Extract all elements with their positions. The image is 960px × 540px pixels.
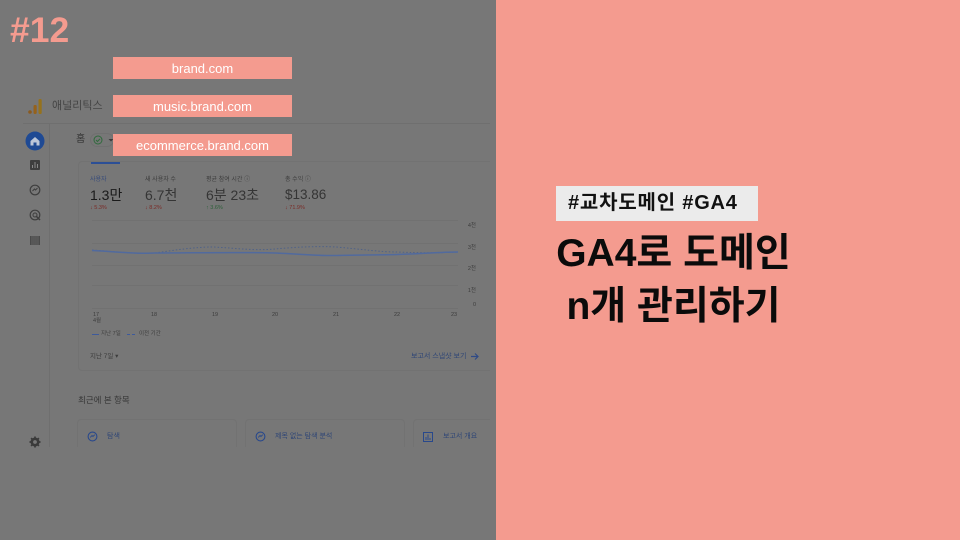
metric: new users: [145, 176, 177, 211]
heading: recently viewed: 최근에 본 항목: [78, 395, 130, 405]
domain label: brand.com: [113, 57, 292, 79]
domain label: brand.com: brand.com: [172, 61, 233, 76]
chart legend: [92, 330, 161, 337]
title: GA4로 도메인: [556, 232, 791, 275]
hashtag label: #교차도메인 #GA4: [568, 192, 738, 214]
metric: new users: 6.7천: [145, 187, 177, 203]
chart legend: 지난 7일: [101, 331, 121, 337]
line chart: users over seven days: 21: [333, 312, 339, 318]
icon: explore: [88, 432, 98, 442]
title: [556, 232, 791, 328]
screenshot header: analytics logo and name: [28, 99, 103, 114]
page heading: home: [76, 133, 113, 145]
icon: home: [26, 132, 44, 150]
line chart: users over seven days: 17: [93, 312, 99, 318]
domain label: ecommerce.brand.com: ecommerce.brand.com: [136, 138, 269, 153]
line chart: users over seven days: 18: [151, 312, 157, 318]
icon: library: [30, 236, 40, 245]
line chart: users over seven days: 2천: [468, 264, 476, 272]
blurred screenshot contents: [26, 99, 479, 448]
metric: new users: 새 사용자 수: [145, 177, 176, 183]
line chart: users over seven days: 22: [394, 312, 400, 318]
icon: status check: [94, 136, 113, 144]
line chart: users over seven days: 0: [473, 302, 476, 308]
active tab indicator: [91, 162, 120, 164]
icon: settings gear: [30, 436, 40, 448]
icon: explore: [256, 432, 266, 442]
line chart: users over seven days: 3천: [468, 243, 476, 251]
metric: new users: ↓ 8.2%: [145, 205, 162, 211]
report snapshot link: 보고서 스냅샷 보기: [411, 353, 466, 360]
hashtag label: [556, 186, 758, 221]
metric: users: ↓ 5.3%: [90, 205, 107, 211]
metric: total revenue: 총 수익 ⓘ: [285, 177, 311, 183]
line chart: users over seven days: 20: [272, 312, 278, 318]
metric: average engagement time: 평균 참여 시간 ⓘ: [206, 177, 250, 183]
icon: reports: [30, 160, 40, 170]
card: reports overview: [413, 419, 490, 447]
slide number: #12: [10, 10, 69, 50]
card: reports overview: 보고서 개요: [443, 433, 477, 440]
chart legend: 이전 기간: [139, 331, 161, 337]
icon: analytics bars: [28, 99, 42, 114]
line chart: users over seven days: 19: [212, 312, 218, 318]
line chart: users over seven days: 4천: [468, 221, 476, 229]
metric: average engagement time: ↑ 3.6%: [206, 205, 223, 211]
card: untitled exploration: 제목 없는 탐색 분석: [275, 433, 332, 440]
title: n개 관리하기: [566, 285, 781, 328]
metric: average engagement time: [206, 176, 259, 211]
panel: metrics card: [78, 161, 490, 371]
metric: users: [90, 176, 122, 211]
metric: total revenue: ↓ 71.9%: [285, 205, 305, 211]
metric: total revenue: $13.86: [285, 187, 326, 202]
page heading: home: 홈: [76, 134, 85, 145]
card: explore: 탐색: [107, 433, 120, 440]
icon: explore: [30, 184, 40, 196]
metric: average engagement time: 6분 23초: [206, 187, 259, 203]
product name: 애널리틱스: [52, 100, 103, 112]
domain label: ecommerce.brand.com: [113, 134, 292, 156]
icon: arrow right: [471, 353, 479, 360]
panel: title background: [496, 0, 960, 540]
line chart: users over seven days: [92, 221, 476, 318]
screenshot frame lines: [23, 123, 490, 124]
month label: 4월: [93, 318, 101, 324]
date range selector: 지난 7일 ▾: [90, 353, 118, 360]
domain label: music.brand.com: [113, 95, 292, 117]
icon: report chart: [423, 432, 433, 442]
panel: dimmed analytics screenshot: [0, 0, 496, 540]
domain label: music.brand.com: music.brand.com: [153, 99, 252, 114]
sidebar navigation icons: [26, 132, 44, 448]
metric: users: 사용자: [90, 177, 107, 183]
card: explore: [77, 419, 237, 447]
metric: users: 1.3만: [90, 187, 122, 203]
icon: advertising: [30, 210, 40, 220]
metric: total revenue: [285, 176, 326, 211]
line chart: users over seven days: 23: [451, 312, 457, 318]
card: untitled exploration: [245, 419, 405, 447]
line chart: users over seven days: 1천: [468, 286, 476, 294]
